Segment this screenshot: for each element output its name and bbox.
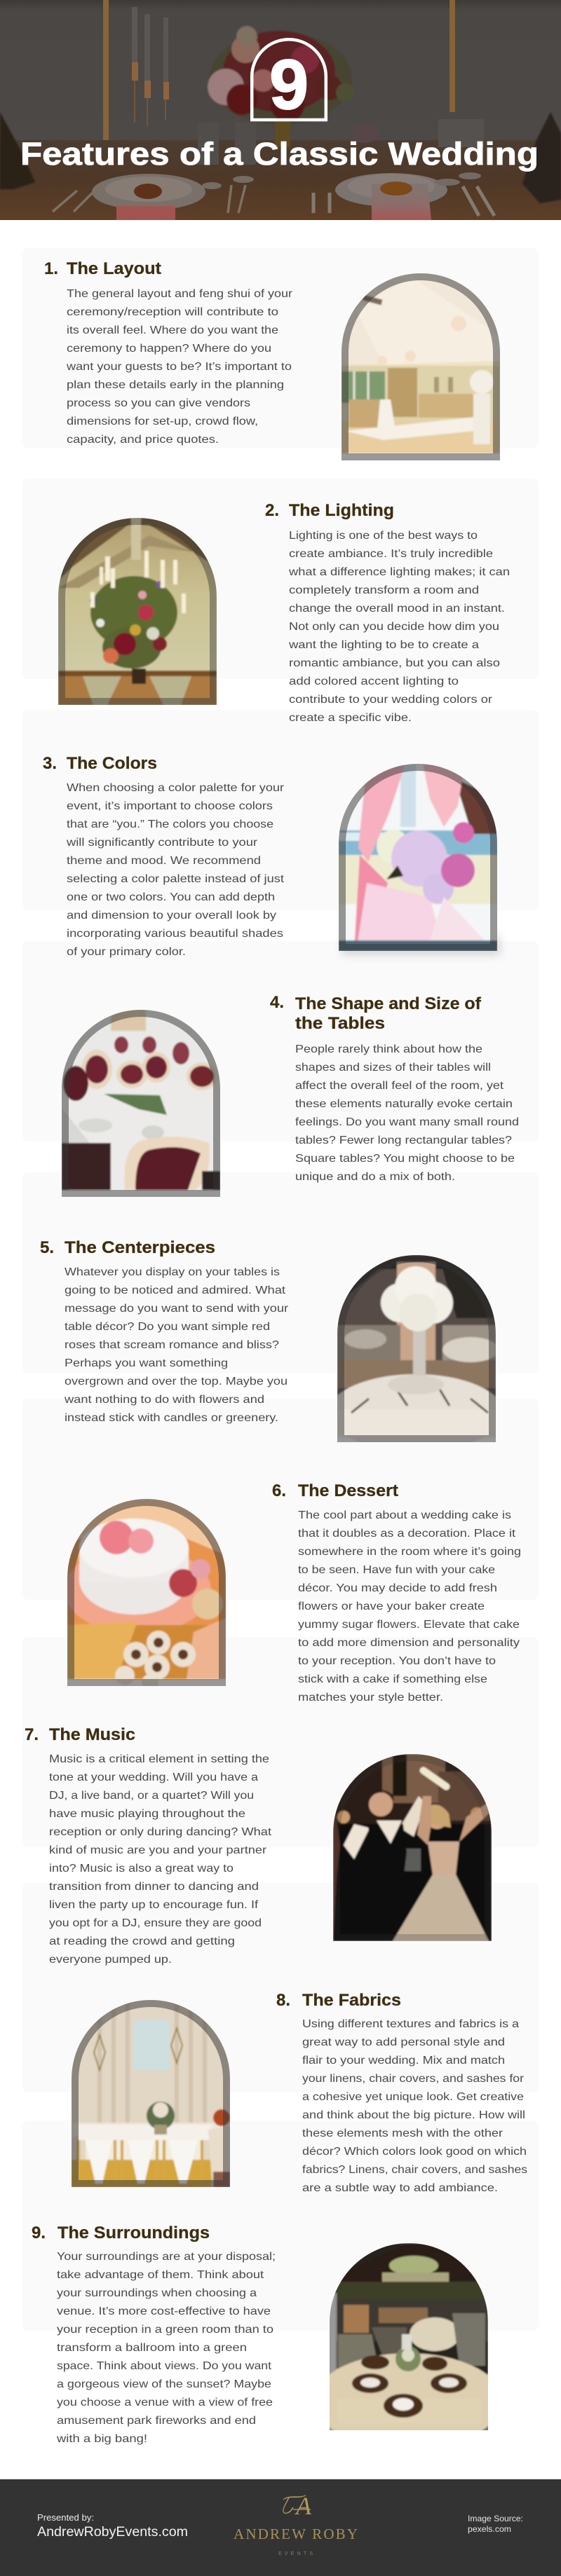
text 7: reception or only during dancing? What: [49, 1826, 272, 1838]
text 6: décor. You may decide to add fresh: [298, 1582, 497, 1594]
text 2: romantic ambiance, but you can also: [289, 657, 500, 669]
text 4: shapes and sizes of their tables will: [295, 1062, 491, 1074]
text 1: [66, 288, 293, 446]
text 8: Using different textures and fabrics is a: [302, 2018, 519, 2030]
heading 5: 5.: [40, 1238, 54, 1257]
text 9: with a big bang!: [56, 2433, 147, 2445]
text 8: your linens, chair covers, and sashes for: [302, 2073, 525, 2085]
text 9: a gorgeous view of the sunset? Maybe: [57, 2378, 271, 2390]
text 9: amusement park fireworks and end: [57, 2415, 256, 2427]
photo 1: ceremony room: [342, 273, 500, 460]
image source credit: Image Source:: [468, 2514, 523, 2523]
frame: [72, 2000, 230, 2187]
heading 6: 6.: [272, 1481, 286, 1500]
text 9: space. Think about views. Do you want: [57, 2360, 272, 2372]
heading 6: The Dessert: [298, 1481, 398, 1500]
text 8: great way to add personal style and: [302, 2036, 505, 2048]
photo 7: couple dancing: [333, 1754, 492, 1941]
heading 7: The Music: [49, 1725, 135, 1744]
text 6: flowers or have your baker create: [298, 1601, 485, 1612]
frame: [337, 1255, 496, 1442]
text 1: ceremony/reception will contribute to: [67, 306, 278, 318]
text 7: [49, 1753, 272, 1966]
title: Features of a Classic Wedding: [20, 136, 539, 172]
heading 3: The Colors: [67, 754, 157, 773]
heading 1: The Layout: [67, 259, 161, 278]
text 9: transform a ballroom into a green: [57, 2342, 247, 2354]
text 2: change the overall mood in an instant.: [289, 603, 505, 615]
logo: Andrew Roby Events: [234, 2492, 358, 2556]
text 3: event, it’s important to choose colors: [67, 800, 273, 812]
heading 2: 2.: [265, 501, 279, 520]
text 2: create ambiance. It’s truly incredible: [289, 548, 493, 560]
text 7: kind of music are you and your partner: [49, 1844, 267, 1856]
heading 4: 4.: [270, 993, 284, 1012]
logo: Andrew Roby Events: EVENTS: [278, 2551, 313, 2556]
heading 2: The Lighting: [289, 501, 394, 520]
text 2: completely transform a room and: [289, 584, 479, 596]
photo 6: wedding cake: [64, 1499, 226, 1691]
text 9: your reception in a green room than to: [57, 2324, 273, 2336]
text 7: everyone pumped up.: [49, 1954, 172, 1966]
frame: [339, 764, 497, 951]
heading 7: 7.: [25, 1725, 39, 1744]
text 8: these elements mesh with the other: [302, 2128, 503, 2139]
text 8: flair to your wedding. Mix and match: [302, 2055, 505, 2067]
text 2: contribute to your wedding colors or: [289, 694, 493, 706]
section 2: the lighting: [58, 501, 510, 724]
text 9: your surroundings when choosing a: [57, 2287, 257, 2299]
text 9: you choose a venue with a view of free: [57, 2397, 273, 2409]
section 6: the dessert: [64, 1481, 521, 1704]
text 4: [295, 1043, 519, 1183]
footer: [0, 2479, 561, 2576]
photo 4: round table: [62, 1010, 220, 1197]
text 3: of your primary color.: [67, 946, 186, 958]
image source credit: [468, 2514, 523, 2534]
text 2: what a difference lighting makes; it can: [288, 566, 510, 578]
presenter credit: AndrewRobyEvents.com: [37, 2525, 188, 2540]
section 5: the centerpieces: [40, 1238, 503, 1451]
section 1: the layout: [44, 259, 500, 460]
text 1: dimensions for set-up, crowd flow,: [67, 416, 258, 427]
heading 4: The Shape and Size of: [295, 994, 482, 1013]
text 6: somewhere in the room where it’s going: [298, 1546, 521, 1558]
text 7: at reading the crowd and getting: [49, 1936, 235, 1947]
heading 9: 9.: [32, 2224, 46, 2242]
text 5: want nothing to do with flowers and: [64, 1394, 264, 1406]
text 7: transition from dinner to dancing and: [49, 1881, 259, 1893]
text 6: yummy sugar flowers. Elevate that cake: [298, 1619, 520, 1631]
text 2: create a specific vibe.: [289, 712, 412, 724]
presenter credit: [37, 2512, 188, 2540]
presenter credit: Presented by:: [37, 2512, 94, 2523]
text 8: a cohesive yet unique look. Get creative: [302, 2091, 524, 2103]
frame: [58, 518, 217, 705]
text 5: roses that scream romance and bliss?: [65, 1339, 279, 1351]
heading 8: The Fabrics: [302, 1991, 401, 2010]
text 7: DJ, a live band, or a quartet? Will you: [49, 1790, 254, 1802]
text 5: Perhaps you want something: [65, 1357, 228, 1369]
text 5: going to be noticed and admired. What: [65, 1284, 286, 1296]
section 7: the music: [25, 1725, 492, 1966]
text 4: feelings. Do you want many small round: [295, 1116, 519, 1128]
text 6: matches your style better.: [298, 1692, 443, 1704]
text 2: Not only can you decide how dim you: [289, 621, 499, 633]
text 1: The general layout and feng shui of your: [67, 288, 293, 300]
text 3: incorporating various beautiful shades: [67, 928, 283, 940]
heading 4: [270, 993, 482, 1033]
header banner: [0, 0, 561, 220]
text 6: The cool part about a wedding cake is: [298, 1509, 511, 1521]
text 1: want your guests to be? It’s important to: [66, 361, 292, 373]
heading 8: 8.: [276, 1991, 290, 2010]
text 4: Square tables? You might choose to be: [295, 1153, 515, 1165]
section 8: the fabrics: [72, 1991, 527, 2194]
logo: Andrew Roby Events: ANDREW ROBY: [234, 2526, 358, 2542]
text 3: and dimension to your overall look by: [67, 910, 276, 922]
header photo background: [0, 0, 561, 220]
frame: [342, 273, 500, 460]
heading 5: The Centerpieces: [65, 1238, 215, 1257]
text 5: table décor? Do you want simple red: [65, 1321, 270, 1333]
text 7: Music is a critical element in setting the: [49, 1753, 269, 1765]
heading 1: 1.: [44, 259, 58, 278]
text 5: message do you want to send with your: [65, 1303, 289, 1315]
frame: [62, 1010, 220, 1197]
text 7: liven the party up to encourage fun. If: [49, 1899, 259, 1911]
text 2: Lighting is one of the best ways to: [289, 530, 478, 542]
text 3: will significantly contribute to your: [66, 837, 258, 849]
text 3: When choosing a color palette for your: [67, 782, 285, 794]
text 7: have music playing throughout the: [49, 1808, 245, 1820]
text 4: People rarely think about how the: [295, 1043, 482, 1055]
photo 3: pink ribbons and flowers: [339, 764, 500, 955]
text 8: and think about the big picture. How will: [302, 2109, 525, 2121]
text 2: want the lighting to be to create a: [288, 639, 479, 651]
text 1: capacity, and price quotes.: [67, 434, 219, 446]
text 5: [64, 1266, 289, 1424]
text 8: fabrics? Linens, chair covers, and sashes: [302, 2164, 527, 2176]
text 3: one or two colors. You can add depth: [67, 891, 275, 903]
photo 8: draped table with gold chairs: [72, 2000, 230, 2187]
arch outline with number 9: 9: [269, 46, 309, 124]
text 5: instead stick with candles or greenery.: [65, 1412, 278, 1424]
text 4: unique and do a mix of both.: [295, 1171, 455, 1183]
text 9: venue. It’s more cost-effective to have: [57, 2306, 271, 2317]
text 6: [298, 1509, 521, 1704]
text 8: [302, 2018, 527, 2194]
text 2: add colored accent lighting to: [289, 676, 459, 687]
text 4: these elements naturally evoke certain: [295, 1098, 513, 1110]
text 4: tables? Fewer long rectangular tables?: [295, 1135, 512, 1146]
logo: Andrew Roby Events: A: [295, 2492, 312, 2520]
text 3: that are “you.” The colors you choose: [67, 818, 273, 830]
text 7: into? Music is also a great way to: [49, 1863, 234, 1875]
panel backgrounds: [22, 248, 539, 2331]
text 5: Whatever you display on your tables is: [65, 1266, 280, 1278]
heading 9: The Surroundings: [58, 2224, 210, 2242]
text 1: plan these details early in the planning: [67, 379, 284, 391]
frame: [333, 1754, 492, 1941]
text 8: décor? Which colors look good on which: [302, 2146, 527, 2158]
text 9: take advantage of them. Think about: [57, 2269, 264, 2281]
text 1: process so you can give vendors: [67, 397, 250, 409]
text 5: overgrown and over the top. Maybe you: [65, 1376, 288, 1388]
photo 9: reception hall: [330, 2243, 488, 2430]
image source credit: pexels.com: [468, 2524, 511, 2534]
text 6: to your reception. You don’t have to: [298, 1655, 496, 1667]
text 7: tone at your wedding. Will you have a: [49, 1772, 258, 1783]
text 3: theme and mood. We recommend: [67, 855, 261, 867]
photo 5: white flower centerpiece: [337, 1255, 496, 1442]
section 9: the surroundings: [32, 2224, 503, 2448]
text 9: [56, 2251, 276, 2445]
heading 4: the Tables: [295, 1014, 385, 1033]
frame: [67, 1499, 226, 1686]
text 9: Your surroundings are at your disposal;: [57, 2251, 276, 2263]
text 8: are a subtle way to add ambiance.: [302, 2182, 498, 2194]
text 2: [288, 530, 510, 724]
photo 2: floral chandelier: [58, 518, 217, 705]
text 1: its overall feel. Where do you want the: [67, 324, 278, 336]
section 4: the shape and size of the tables: [62, 993, 519, 1197]
section 3: the colors: [43, 754, 500, 958]
text 6: that it doubles as a decoration. Place it: [298, 1528, 516, 1540]
text 3: [66, 782, 285, 958]
text 6: stick with a cake if something else: [298, 1673, 487, 1685]
text 6: to be seen. Have fun with your cake: [298, 1564, 495, 1576]
text 7: you opt for a DJ, ensure they are good: [49, 1917, 262, 1929]
text 6: to add more dimension and personality: [298, 1637, 520, 1649]
text 4: affect the overall feel of the room, yet: [295, 1080, 504, 1092]
text 3: selecting a color palette instead of just: [67, 873, 285, 885]
text 1: ceremony to happen? Where do you: [67, 343, 271, 355]
heading 3: 3.: [43, 754, 57, 773]
arch outline with number 9: [252, 39, 326, 124]
